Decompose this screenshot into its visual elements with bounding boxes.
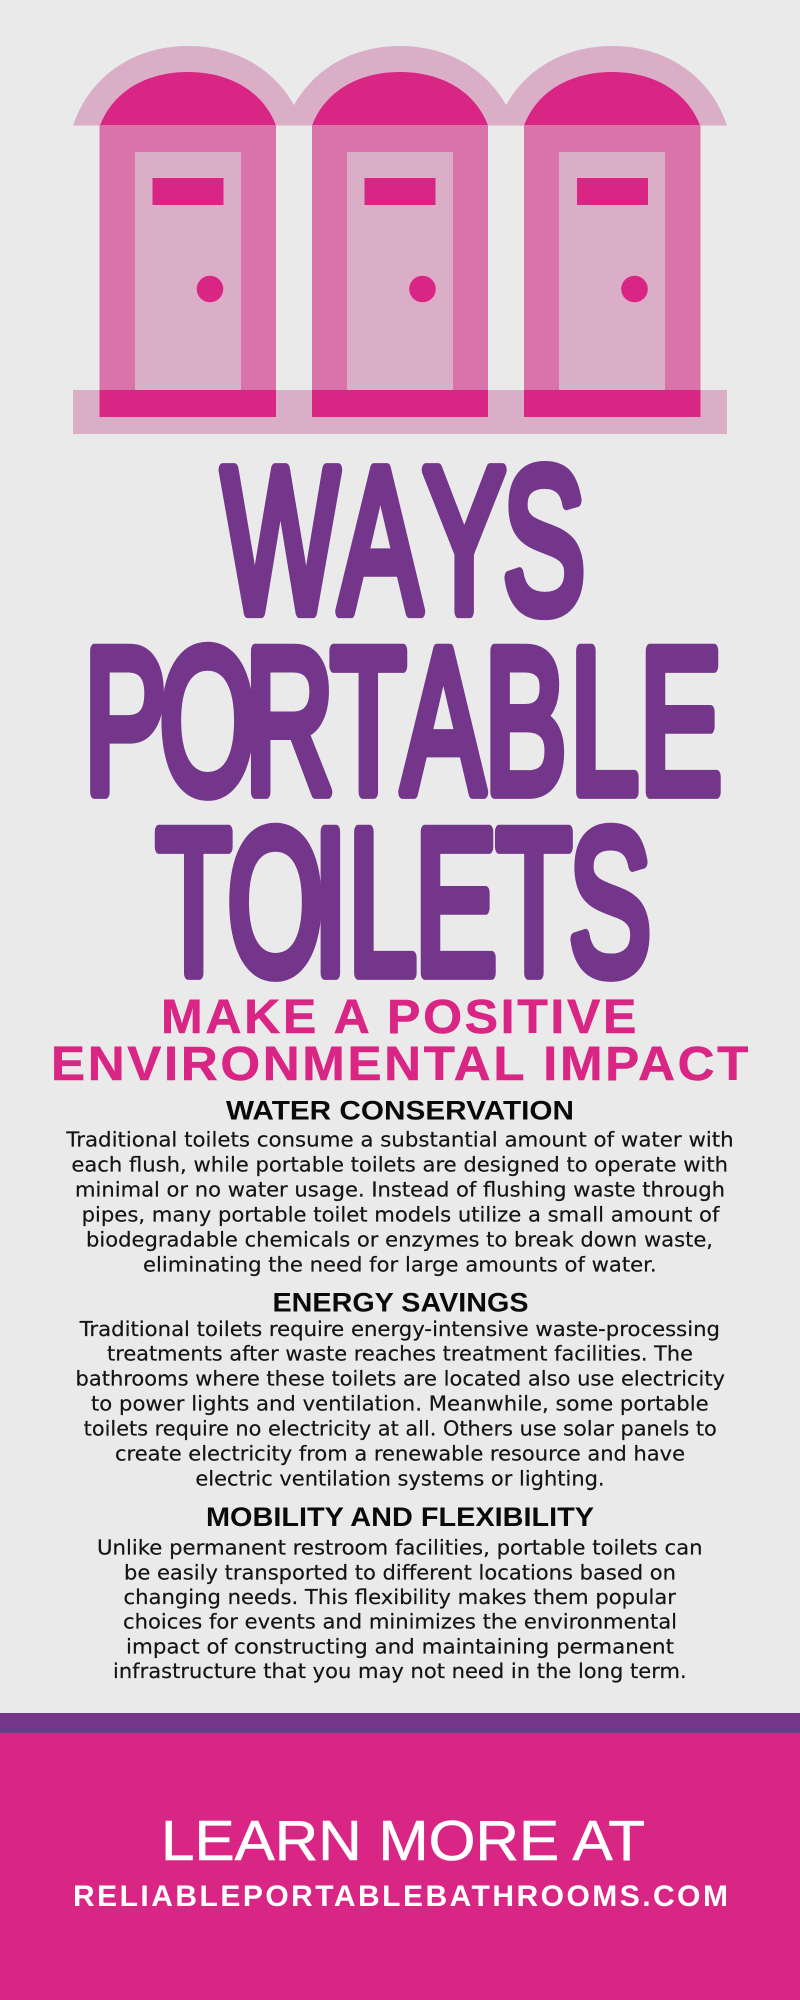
- title: WAYS: [222, 425, 585, 655]
- text block: mobility and flexibility: be easily transported to different locations based on: [124, 1560, 676, 1584]
- text block: water conservation: biodegradable chemicals or enzymes to break down waste,: [86, 1228, 713, 1252]
- text block: water conservation: eliminating the need for large amounts of water.: [143, 1252, 657, 1276]
- text block: energy savings: [76, 1317, 725, 1490]
- toilet 3: [524, 72, 700, 417]
- text block: mobility and flexibility: changing needs. This flexibility makes them popular: [124, 1585, 677, 1609]
- text block: mobility and flexibility: impact of constructing and maintaining permanent: [126, 1634, 674, 1658]
- text block: water conservation: [65, 1127, 734, 1276]
- text block: energy savings: Traditional toilets require energy-intensive waste-processing: [79, 1317, 720, 1341]
- website address: RELIABLEPORTABLEBATHROOMS.COM: [73, 1880, 728, 1913]
- heading: water conservation: WATER CONSERVATION: [226, 1096, 574, 1126]
- title: TOILETS: [156, 786, 651, 1017]
- text block: energy savings: bathrooms where these toilets are located also use electricity: [76, 1367, 725, 1391]
- text block: mobility and flexibility: Unlike permanent restroom facilities, portable toilets can: [97, 1536, 703, 1560]
- section: energy savings: [76, 1288, 725, 1490]
- section: water conservation: [65, 1096, 734, 1276]
- heading: mobility and flexibility: MOBILITY AND FLEXIBILITY: [206, 1502, 594, 1532]
- toilet 1: [100, 72, 276, 417]
- text block: energy savings: create electricity from a renewable resource and have: [115, 1441, 685, 1465]
- subtitle: MAKE A POSITIVE: [161, 991, 639, 1044]
- text block: water conservation: each flush, while portable toilets are designed to operate with: [71, 1152, 728, 1176]
- title: [84, 425, 722, 1017]
- illustration: three portable toilets: [73, 46, 727, 434]
- toilet 2: [312, 72, 488, 417]
- text block: mobility and flexibility: choices for events and minimizes the environmental: [123, 1609, 677, 1633]
- roofs and base strip: [73, 46, 727, 434]
- call to action: LEARN MORE AT: [161, 1809, 645, 1873]
- text block: mobility and flexibility: [97, 1536, 703, 1683]
- text block: water conservation: minimal or no water usage. Instead of flushing waste through: [75, 1177, 725, 1201]
- text block: energy savings: treatments after waste reaches treatment facilities. The: [107, 1342, 693, 1366]
- subtitle: [51, 991, 751, 1091]
- text block: water conservation: Traditional toilets consume a substantial amount of water with: [65, 1127, 734, 1151]
- text block: energy savings: to power lights and ventilation. Meanwhile, some portable: [91, 1392, 709, 1416]
- title: PORTABLE: [84, 605, 722, 836]
- text block: mobility and flexibility: infrastructure that you may not need in the long term.: [113, 1659, 687, 1683]
- section: mobility and flexibility: [97, 1502, 703, 1683]
- footer band: [0, 1713, 800, 1733]
- subtitle: ENVIRONMENTAL IMPACT: [51, 1038, 751, 1091]
- text block: energy savings: toilets require no electricity at all. Others use solar panels to: [84, 1416, 717, 1440]
- text block: energy savings: electric ventilation systems or lighting.: [195, 1466, 605, 1490]
- heading: energy savings: ENERGY SAVINGS: [272, 1288, 528, 1318]
- text block: water conservation: pipes, many portable toilet models utilize a small amount of: [82, 1203, 720, 1227]
- footer panel: [0, 1733, 800, 2000]
